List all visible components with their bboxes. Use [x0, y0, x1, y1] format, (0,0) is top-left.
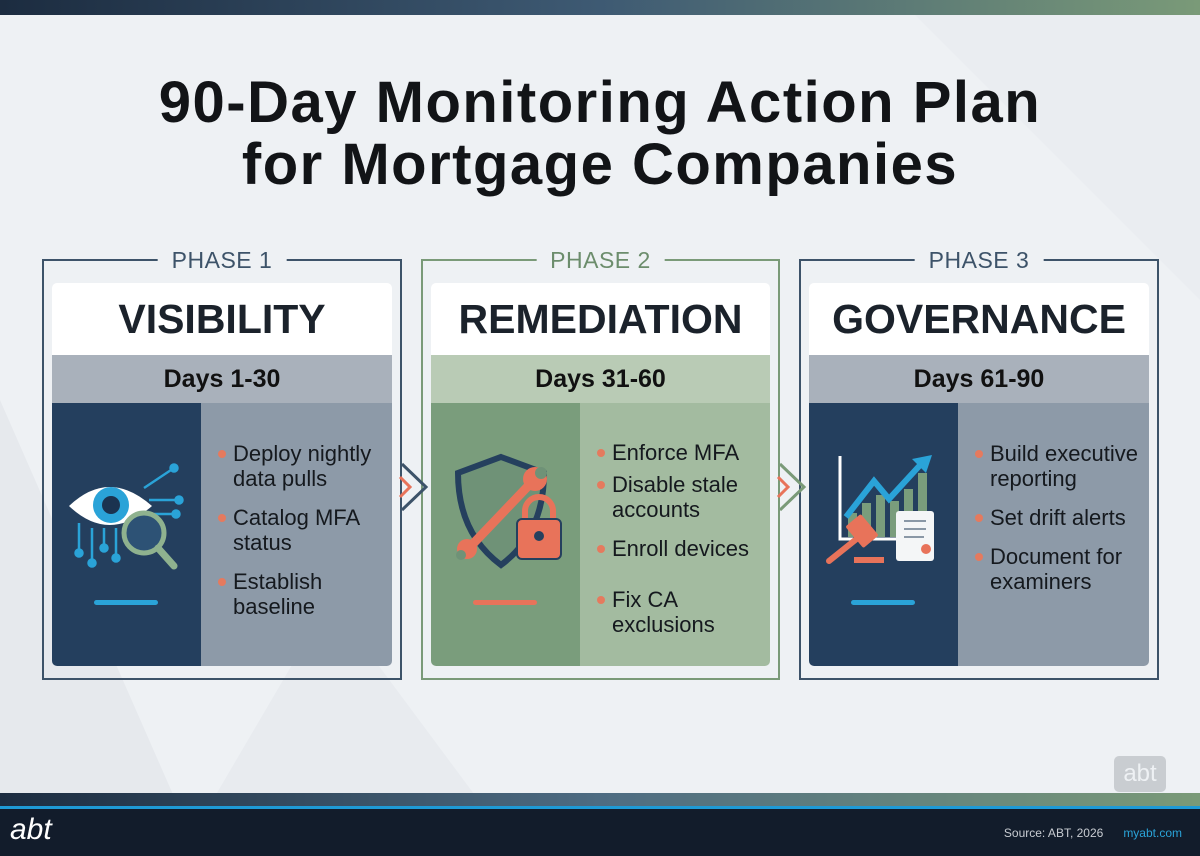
bullets 2: [580, 403, 770, 666]
bullets 1: Catalog MFA status: [233, 505, 359, 555]
bullets 2: Disable stale accounts: [612, 472, 738, 522]
panel: phase 3: [799, 259, 1159, 680]
card 3: GOVERNANCE: [832, 296, 1126, 342]
card 3: Days 61-90: [914, 365, 1044, 393]
bullets 1: [201, 403, 392, 666]
title: for Mortgage Companies: [242, 132, 958, 197]
bullets 1: Establish baseline: [233, 569, 322, 619]
footer: [0, 806, 1200, 856]
card 1: VISIBILITY: [118, 296, 326, 342]
panel: phase 1: [42, 259, 402, 680]
icon: eye with magnifier: [69, 463, 184, 570]
card 2: Days 31-60: [535, 365, 666, 393]
icon: chart gavel document: [826, 455, 934, 564]
arrow: phase 1 to 2: [399, 462, 428, 512]
footer gradient band: [0, 793, 1200, 806]
panel: phase 2: [421, 259, 780, 680]
top bar: [0, 0, 1200, 15]
card 1: [52, 283, 392, 666]
bullets 3: [958, 403, 1149, 666]
card 2: [431, 283, 770, 666]
title: [159, 70, 1041, 197]
card 2: REMEDIATION: [459, 296, 742, 342]
footer logo: abt: [10, 813, 52, 846]
watermark logo: [1114, 756, 1166, 792]
source text: Source: ABT, 2026 myabt.com: [1004, 826, 1182, 840]
bullets 2: Enforce MFA: [612, 440, 739, 465]
phase label 1: PHASE 1: [172, 247, 272, 273]
bullets 2: Fix CA exclusions: [612, 587, 715, 637]
bullets 3: Set drift alerts: [990, 505, 1126, 530]
phase label 3: PHASE 3: [929, 247, 1029, 273]
phase label 2: PHASE 2: [550, 247, 651, 273]
bullets 3: Build executive reporting: [990, 441, 1138, 491]
icon: shield wrench lock: [455, 454, 562, 569]
bullets 1: Deploy nightly data pulls: [233, 441, 371, 491]
title: 90-Day Monitoring Action Plan: [159, 70, 1041, 135]
card 3: [809, 283, 1149, 666]
bullets 3: Document for examiners: [990, 544, 1122, 594]
bullets 2: Enroll devices: [612, 536, 749, 561]
watermark logo: abt: [1123, 760, 1157, 787]
arrow: phase 2 to 3: [777, 463, 806, 511]
card 1: Days 1-30: [164, 365, 280, 393]
